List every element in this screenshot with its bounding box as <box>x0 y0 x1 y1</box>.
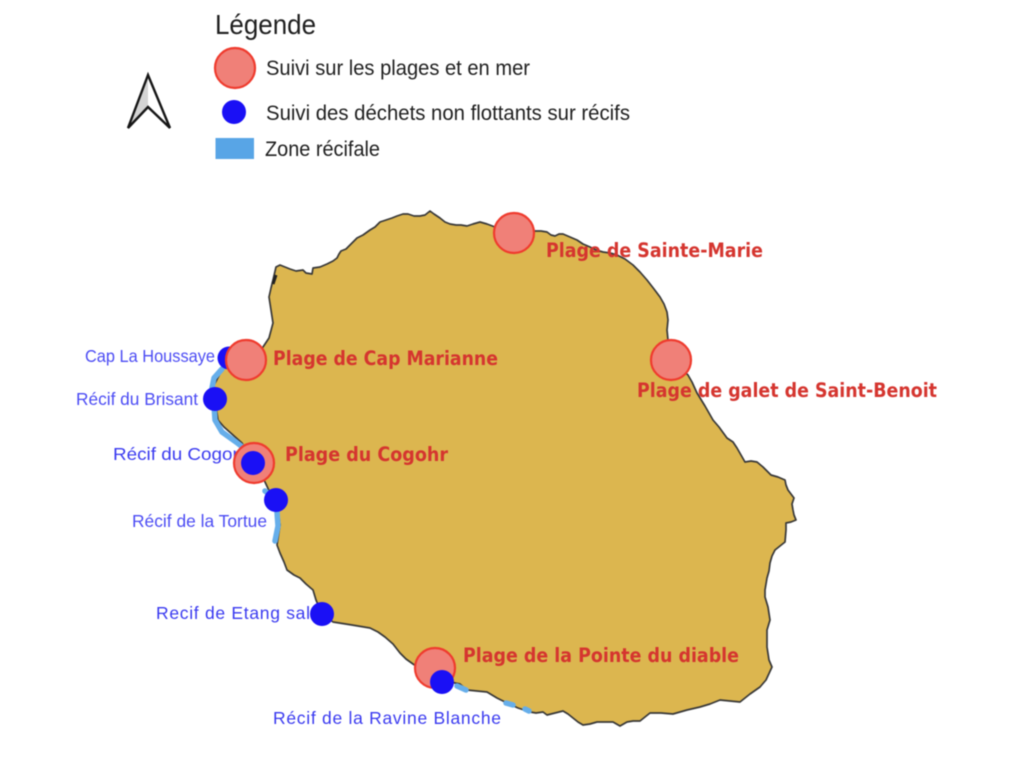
site: Récif de la Ravine Blanche <box>430 670 454 694</box>
legend label: beach and sea monitoring: Suivi sur les plages et en mer <box>266 57 530 80</box>
site: Plage du Cogohr <box>234 443 274 483</box>
label: Récif de la Ravine Blanche: Récif de la Ravine Blanche <box>273 708 501 728</box>
site: Plage de Sainte-Marie <box>494 213 534 253</box>
label: Cap La Houssaye: Cap La Houssaye <box>85 346 215 366</box>
site: Plage de galet de Saint-Benoit <box>651 340 691 380</box>
label: Plage de Cap Marianne: Plage de Cap Marianne <box>273 347 498 370</box>
site: Récif de Etang salé <box>310 602 334 626</box>
legend <box>215 9 630 161</box>
label: Récif du Brisant: Récif du Brisant <box>76 389 198 409</box>
label: Plage de galet de Saint-Benoit: Plage de galet de Saint-Benoit <box>637 379 937 402</box>
legend title: Légende <box>215 9 316 40</box>
label: Plage du Cogohr: Plage du Cogohr <box>285 443 448 466</box>
label: Récif de la Tortue: Récif de la Tortue <box>132 511 267 531</box>
site: Plage de Cap Marianne <box>226 340 266 380</box>
site: Récif de la Tortue <box>264 488 288 512</box>
site: Plage de la Pointe du diable <box>415 648 455 688</box>
label: Récif du Cogon: Récif du Cogon <box>113 444 243 464</box>
legend label: reef zone: Zone récifale <box>265 138 380 161</box>
legend label: reef debris monitoring: Suivi des déchets non flottants sur récifs <box>266 102 630 125</box>
label: Recif de Etang sal: Recif de Etang sal <box>156 603 310 623</box>
label: Plage de la Pointe du diable: Plage de la Pointe du diable <box>463 644 739 667</box>
island of La Réunion <box>213 211 796 726</box>
legend symbol: beach and sea monitoring <box>215 48 255 88</box>
site: Cap La Houssaye <box>218 346 240 370</box>
site: Récif du Brisant <box>203 387 227 411</box>
coastal notch detail <box>273 275 276 284</box>
label: Plage de Sainte-Marie: Plage de Sainte-Marie <box>546 239 763 262</box>
legend symbol: reef debris monitoring <box>222 100 246 124</box>
icon: north arrow <box>128 75 170 128</box>
reef zones <box>212 369 529 711</box>
site: Récif du Cogon <box>241 451 265 475</box>
legend symbol: reef zone <box>216 138 254 159</box>
